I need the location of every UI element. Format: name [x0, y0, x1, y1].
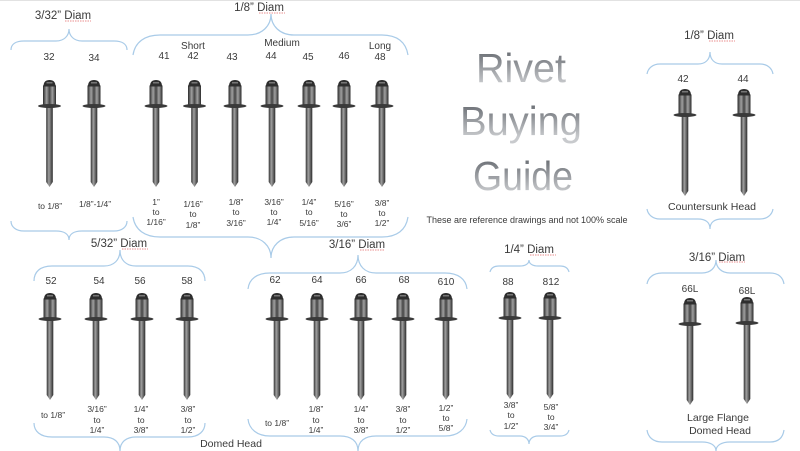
bottom brace [11, 221, 127, 240]
panel: countersunk head rivets [647, 30, 773, 229]
part numbers: 42 [187, 51, 199, 62]
title: Rivet Buying Guide: Buying [460, 98, 582, 144]
grip ranges: 1” [152, 197, 160, 207]
top brace [490, 260, 569, 272]
grip ranges: 5/8” [544, 402, 558, 412]
part numbers: 88 [502, 277, 514, 288]
length groups: Medium [264, 38, 300, 49]
heading: 5/32 Diam: 5/32” Diam [91, 238, 147, 250]
top brace [248, 255, 467, 289]
part numbers: 68L [739, 286, 756, 297]
grip ranges: 3/16” [226, 218, 246, 228]
part numbers: 66 [355, 275, 367, 286]
part numbers [45, 276, 193, 287]
grip ranges: to 1/8” [265, 418, 289, 428]
title: Rivet Buying Guide: Guide [473, 153, 573, 199]
part numbers [43, 52, 100, 64]
top brace [647, 260, 784, 284]
grip ranges: 1/4” [134, 404, 148, 414]
grip ranges [265, 403, 453, 435]
label: Large Flange Domed Head: Domed Head [689, 425, 751, 437]
length groups [181, 38, 391, 52]
top brace [133, 14, 408, 55]
grip ranges: 3/8” [504, 400, 518, 410]
grip ranges: 1/8”-1/4” [79, 199, 111, 209]
part numbers: 43 [226, 52, 238, 63]
heading: 1/8 Diam: 1/8” Diam [234, 2, 284, 14]
grip ranges: to [270, 207, 278, 217]
bottom brace [34, 423, 205, 451]
part numbers: 44 [265, 51, 277, 62]
grip ranges: 1/8” [309, 404, 323, 414]
grip ranges [38, 199, 111, 211]
grip ranges: 1/4” [302, 197, 316, 207]
grip ranges: 5/16” [334, 199, 354, 209]
panel: 1/4 inch diameter rivets [490, 244, 569, 444]
grip ranges: 1/2” [181, 425, 195, 435]
grip ranges: to [152, 207, 160, 217]
grip ranges: to [305, 207, 313, 217]
grip ranges: 1/16” [146, 217, 166, 227]
grip ranges: to [137, 415, 145, 425]
bottom brace [490, 430, 569, 444]
label: Large Flange Domed Head: Large Flange [687, 412, 749, 424]
grip ranges: to [189, 209, 197, 219]
grip ranges: 1/2” [375, 218, 389, 228]
part numbers: 812 [543, 277, 560, 288]
grip ranges: 3/8” [354, 425, 368, 435]
panel: 1/8 inch diameter rivets [133, 2, 408, 258]
grip ranges: 1/8” [229, 197, 243, 207]
grip ranges: 3/16” [87, 404, 107, 414]
grip ranges: 1/8” [186, 220, 200, 230]
grip ranges: 3/8” [375, 198, 389, 208]
part numbers: 62 [269, 275, 281, 286]
grip ranges: 3/16” [264, 197, 284, 207]
grip ranges: to [312, 415, 320, 425]
grip ranges [504, 400, 558, 432]
label: Large Flange Domed Head [687, 412, 751, 437]
part numbers: 41 [158, 51, 170, 62]
grip ranges: to [507, 410, 515, 420]
grip ranges: 1/4” [267, 217, 281, 227]
panel: 5/32 inch diameter rivets [34, 238, 205, 451]
top brace [34, 250, 205, 281]
part numbers [158, 51, 386, 63]
part numbers [502, 277, 560, 288]
label: Domed Head: Domed Head [200, 438, 262, 450]
grip ranges [146, 197, 389, 230]
grip ranges: 3/8” [181, 404, 195, 414]
part numbers: 54 [93, 276, 105, 287]
grip ranges: 3/6” [337, 219, 351, 229]
grip ranges: 1/2” [504, 421, 518, 431]
panel: large flange domed head rivets [647, 252, 784, 451]
grip ranges: 3/8” [396, 404, 410, 414]
part numbers [677, 74, 749, 85]
grip ranges: to [378, 208, 386, 218]
grip ranges: 1/2” [396, 425, 410, 435]
part numbers: 34 [88, 53, 100, 64]
grip ranges [41, 404, 195, 435]
part numbers: 52 [45, 276, 57, 287]
grip ranges: 3/8” [134, 425, 148, 435]
heading: 3/16 Diam: 3/16” Diam [329, 239, 385, 251]
part numbers: 42 [677, 74, 689, 85]
grip ranges: 1/16” [183, 199, 203, 209]
note: reference drawings disclaimer: These are reference drawings and not 100% scale [426, 215, 628, 225]
part numbers: 32 [43, 52, 55, 63]
grip ranges: to [340, 209, 348, 219]
bottom brace [248, 419, 467, 451]
part numbers: 68 [398, 275, 410, 286]
bottom brace [647, 209, 773, 229]
part numbers: 64 [311, 275, 323, 286]
part numbers: 45 [302, 52, 314, 63]
rivets [266, 293, 458, 400]
grip ranges: to [357, 415, 365, 425]
heading: 1/8 Diam: 1/8” Diam [684, 30, 734, 42]
title: Rivet Buying Guide [460, 45, 582, 199]
heading: 3/16 Diam: 3/16” Diam [689, 252, 745, 264]
grip ranges: 3/4” [544, 422, 558, 432]
heading: 3/32 Diam: 3/32” Diam [35, 10, 91, 22]
part numbers: 46 [338, 51, 350, 62]
part numbers: 48 [374, 52, 386, 63]
part numbers: 56 [134, 276, 146, 287]
heading: 1/4 Diam: 1/4” Diam [504, 244, 554, 256]
grip ranges: to [547, 412, 555, 422]
length groups: Short [181, 41, 205, 52]
rivets [144, 80, 394, 187]
part numbers: 44 [737, 74, 749, 85]
rivets [674, 89, 756, 196]
rivets [38, 80, 106, 187]
grip ranges: 1/4” [309, 425, 323, 435]
part numbers: 610 [438, 277, 455, 288]
grip ranges: 1/4” [90, 425, 104, 435]
part numbers: 66L [682, 284, 699, 295]
bottom brace [133, 217, 408, 258]
rivets [678, 297, 758, 405]
grip ranges: to [399, 415, 407, 425]
grip ranges: 1/2” [439, 403, 453, 413]
grip ranges: to 1/8” [38, 201, 62, 211]
top brace [11, 29, 127, 50]
length groups: Long [369, 41, 391, 52]
part numbers: 58 [181, 276, 193, 287]
rivets [38, 293, 198, 400]
part numbers [269, 275, 455, 288]
top brace [647, 52, 773, 74]
grip ranges: to [232, 207, 240, 217]
bottom brace [647, 430, 784, 451]
panel: 3/16 inch diameter rivets [248, 239, 467, 451]
grip ranges: 1/4” [354, 404, 368, 414]
rivets [498, 292, 562, 399]
title: Rivet Buying Guide: Rivet [476, 45, 567, 91]
grip ranges: to [184, 415, 192, 425]
grip ranges: to [442, 413, 450, 423]
grip ranges: 5/8” [439, 423, 453, 433]
grip ranges: to 1/8” [41, 410, 65, 420]
part numbers [682, 284, 756, 297]
grip ranges: 5/16” [299, 218, 319, 228]
label: Countersunk Head: Countersunk Head [668, 201, 756, 213]
panel: 3/32 inch diameter rivets [11, 10, 127, 240]
grip ranges: to [93, 415, 101, 425]
